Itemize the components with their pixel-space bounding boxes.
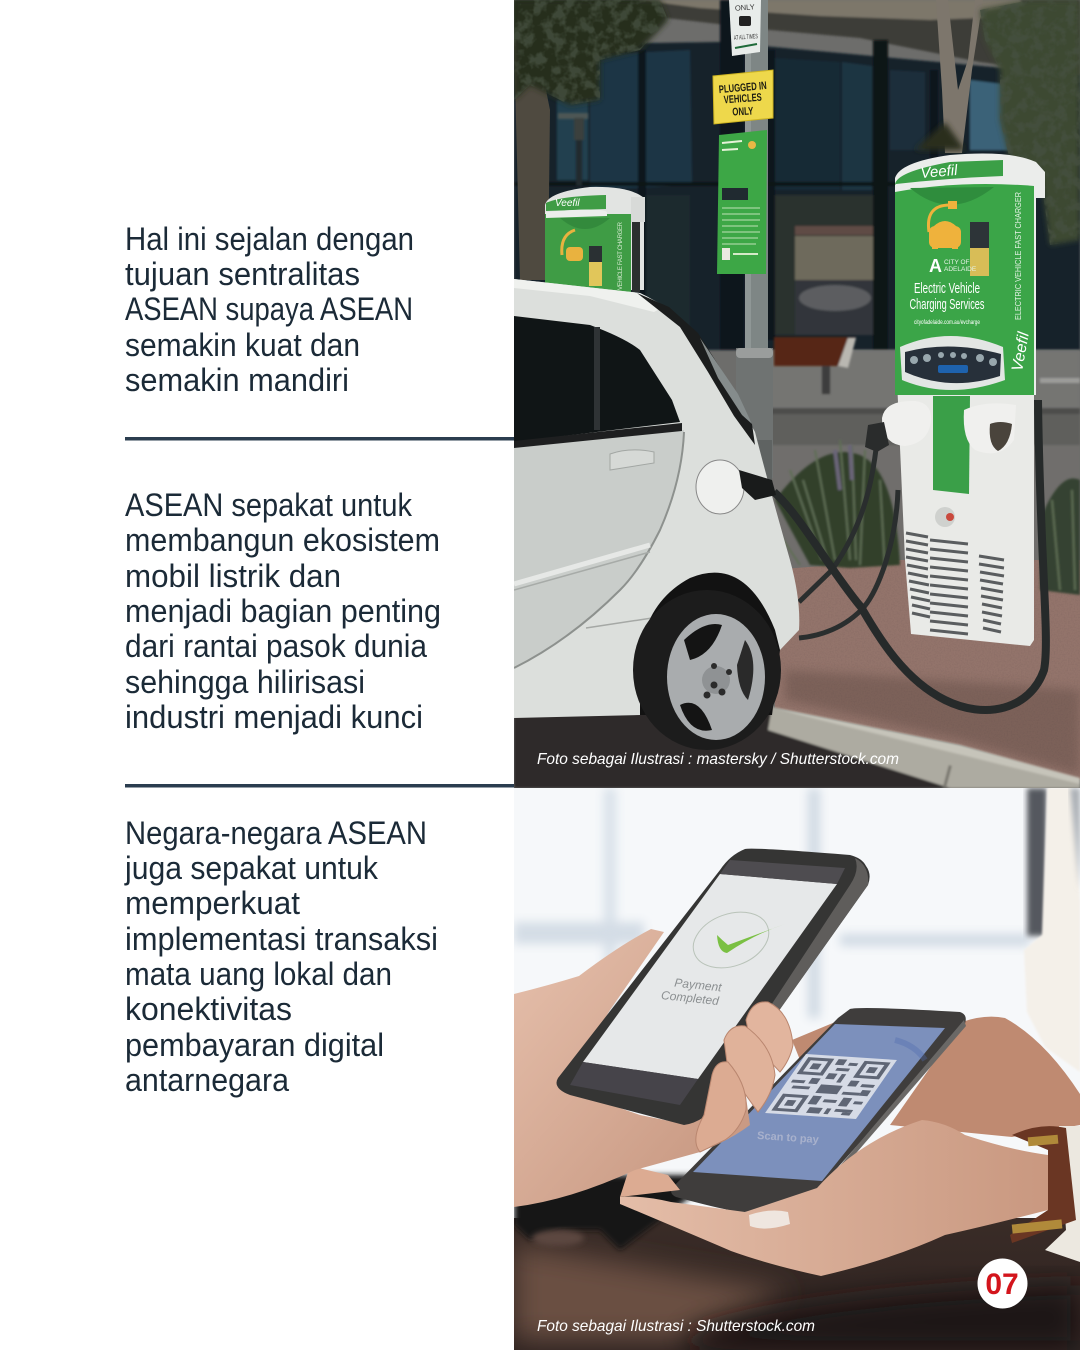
control console [900,336,1005,390]
sign: plugged in vehicles only: ONLY [732,105,754,119]
fuel cap [696,460,744,514]
bench [774,337,856,394]
text block: ekosistem mobil listrik: industri menjadi kunci [125,699,423,735]
rear glass [637,293,755,445]
pavement and road [773,348,1080,444]
text block: transaksi mata uang lokal: Negara-negara ASEAN [125,815,427,851]
main charging station [882,154,1045,646]
text block: ekosistem mobil listrik: dari rantai pasok dunia [125,628,427,664]
lower hand holding blue phone [620,1120,1048,1276]
grass plants [770,440,1080,595]
right holster [964,408,970,444]
text block: transaksi mata uang lokal: juga sepakat untuk [124,850,379,886]
text block: transaksi mata uang lokal: implementasi transaksi [125,921,438,957]
back hand behind blue phone [792,1017,1080,1137]
text block: sentralitas ASEAN: Hal ini sejalan dengan [125,221,414,257]
text block: sentralitas ASEAN: tujuan sentralitas [125,256,360,292]
sign: plugged in vehicles only: VEHICLES [723,92,762,106]
car wheel [633,590,781,750]
photo: QR payment with phones [514,788,1080,1350]
text block: ekosistem mobil listrik: sehingga hilirisasi [125,664,365,700]
thumbnail [749,1211,790,1229]
building soffit [514,0,1080,75]
text block: transaksi mata uang lokal: konektivitas [125,991,292,1027]
text block: sentralitas ASEAN: semakin kuat dan [125,327,360,363]
city of adelaide: CITY OF [944,259,970,266]
stop button [935,507,955,527]
divider two [125,784,514,788]
text block: ekosistem mobil listrik: membangun ekosistem [125,522,440,558]
blurred window frames [514,788,1030,1048]
text block: transaksi mata uang lokal: antarnegara [125,1062,289,1098]
page number badge: 07 [985,1268,1019,1301]
leaflet [970,248,989,276]
car body [514,279,799,718]
charging services heading: Charging Services [910,296,984,313]
charging services heading: cityofadelaide.com.au/evcharge [914,320,981,326]
left tree [514,0,668,280]
wristwatch and sleeve [1010,1126,1080,1262]
vertical side label: ELECTRIC VEHICLE FAST CHARGER [1014,192,1023,320]
city of adelaide [930,259,976,272]
QR code [765,1054,897,1119]
sign: all times: ONLY [735,2,755,13]
caption: top photo credit: Foto sebagai Ilustrasi : mastersky / Shutterstock.com [537,751,899,768]
front hand palm [514,929,750,1207]
table surface [514,1175,1080,1350]
yellow car plug logo [928,201,961,249]
blue phone [671,1008,966,1212]
green charger panel [895,184,1034,395]
person sweater and dark background [1024,788,1080,1072]
city of adelaide: ADELAIDE [944,266,977,273]
sign: plugged in vehicles only [713,70,773,124]
side windows [514,316,680,442]
ventilation slats [906,533,1004,634]
caption: bottom photo credit: Foto sebagai Ilustrasi : Shutterstock.com [537,1318,815,1335]
payment phone: Payment [674,976,723,995]
payment phone: Completed [660,988,720,1008]
right tree [915,0,1080,245]
text block: ekosistem mobil listrik: mobil listrik dan [125,558,341,594]
text block: ekosistem mobil listrik: ASEAN sepakat untuk [125,487,413,523]
sign: green instructions poster [717,130,767,274]
green strip [933,396,970,494]
text block: sentralitas ASEAN [125,221,414,398]
front hand fingers [696,1002,793,1152]
door seam and crease [514,432,684,668]
text block: transaksi mata uang lokal: memperkuat [125,885,300,921]
check icon [685,902,785,978]
building glass facade [514,0,1080,350]
charger lower white body [897,380,1034,646]
plug and main cable [739,400,1046,710]
door handle [610,450,654,470]
small background charger: Veefil [555,198,580,209]
blue phone: Scan to pay [757,1130,820,1146]
small background charger [545,187,645,292]
main charging station: Veefil [1009,330,1033,373]
left holster [882,402,900,446]
charging services heading: Electric Vehicle [914,280,980,297]
charging services heading [910,280,984,326]
gravel bed [770,560,1080,780]
small background charger: VEHICLE FAST CHARGER [618,221,624,290]
text block: ekosistem mobil listrik [125,487,441,735]
main charging station: Veefil [920,162,959,182]
text block: ekosistem mobil listrik: menjadi bagian penting [125,593,441,629]
city of adelaide: A [929,256,942,276]
curb and asphalt [514,707,1080,788]
text block: transaksi mata uang lokal [124,815,438,1098]
sign: all times: AT ALL TIMES [734,33,758,42]
text block: transaksi mata uang lokal: pembayaran digital [125,1027,384,1063]
sign: all times [729,0,761,56]
door panel [514,430,684,668]
street lamp in reflection [558,113,588,186]
divider one [125,437,514,440]
page number badge [978,1258,1028,1308]
text block: sentralitas ASEAN: ASEAN supaya ASEAN [125,291,413,327]
charger head [895,154,1045,395]
text block: transaksi mata uang lokal: mata uang lokal dan [125,956,392,992]
payment phone [556,849,870,1125]
secondary charging cables [799,440,898,638]
wheel arch [639,573,780,715]
signpost pole [736,0,773,530]
photo: electric car charging station [514,0,1080,788]
sign: plugged in vehicles only: PLUGGED IN [718,80,767,96]
text block: sentralitas ASEAN: semakin mandiri [125,362,349,398]
